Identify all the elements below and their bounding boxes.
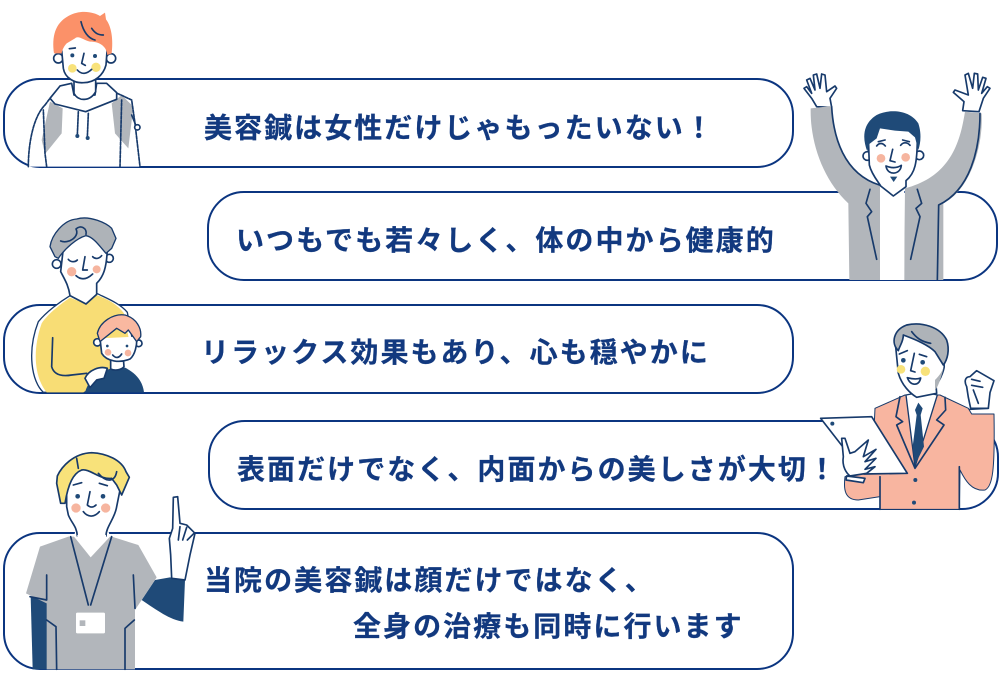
speech pill 2	[208, 192, 997, 280]
speech pill 4	[209, 421, 998, 509]
panel: row 4	[209, 324, 998, 509]
icon: father and child	[32, 218, 144, 392]
text: row 5 line 2: 全身の治療も同時に行います	[353, 611, 744, 642]
panel: row 3	[4, 218, 793, 393]
panel: row 1	[4, 12, 793, 167]
text: row 3: リラックス効果もあり、心も穏やかに	[201, 337, 710, 368]
speech pill 3	[4, 305, 793, 393]
text: row 1: 美容鍼は女性だけじゃもったいない！	[204, 112, 715, 144]
panel: row 5	[4, 453, 793, 669]
speech pill 1	[4, 79, 793, 167]
text: row 4: 表面だけでなく、内面からの美しさが大切！	[237, 453, 838, 485]
icon: businessman with tablet	[821, 324, 994, 509]
icon: medical staff pointing up	[26, 453, 195, 669]
icon: young man with backpack	[28, 12, 140, 167]
text: row 2: いつもでも若々しく、体の中から健康的	[236, 225, 776, 256]
panel: row 2	[208, 73, 997, 280]
speech pill 5	[4, 533, 793, 669]
icon: man raising both hands	[804, 73, 990, 280]
text: row 5 line 1: 当院の美容鍼は顔だけではなく、	[204, 565, 655, 596]
